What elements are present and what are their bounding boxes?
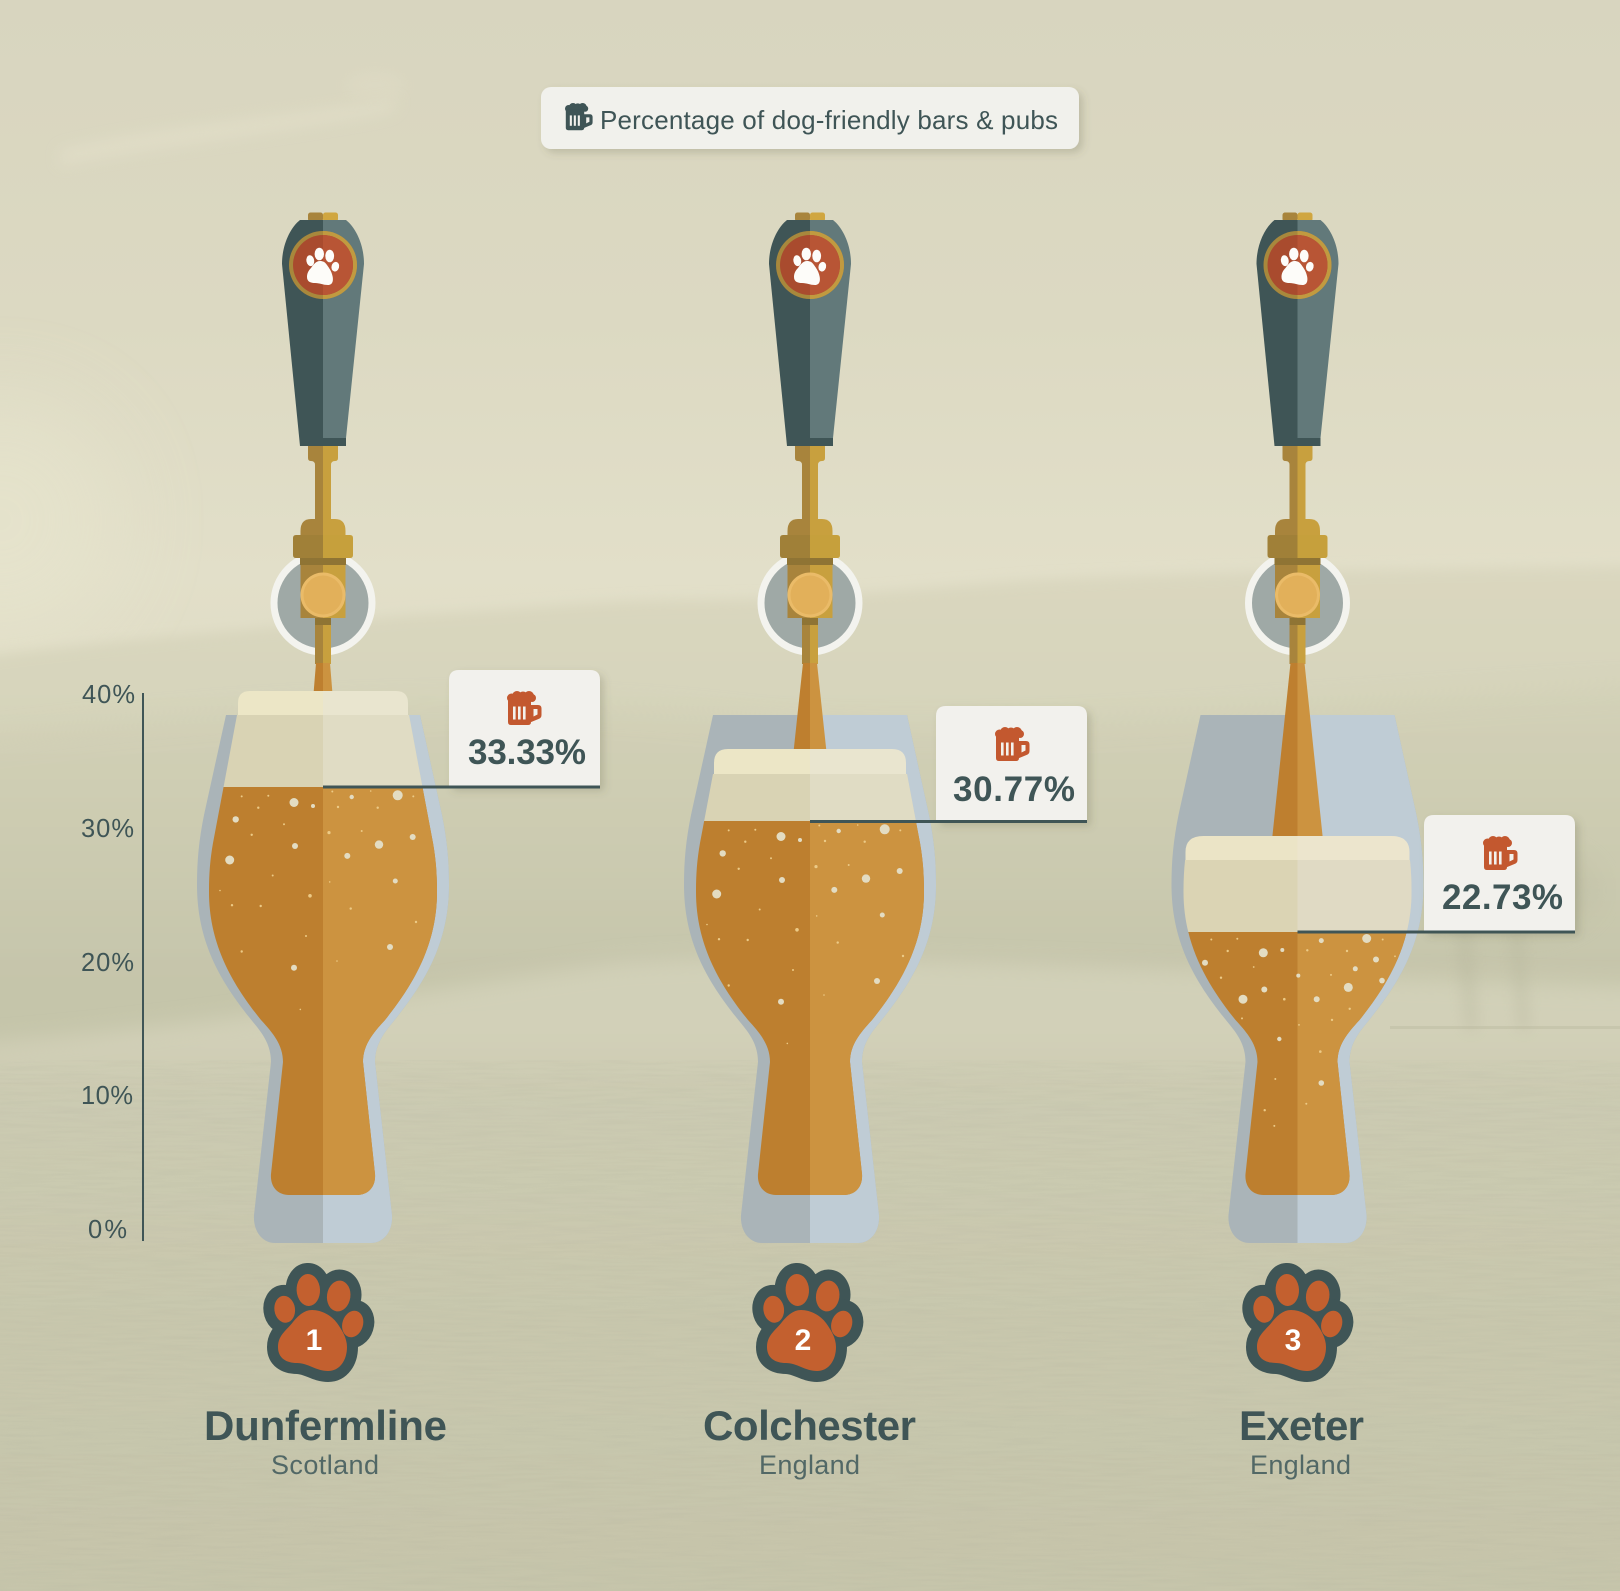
bubbles: Exeter [1202, 934, 1396, 1127]
glass: Colchester [684, 715, 936, 1243]
country: Scotland: Scotland [271, 1450, 379, 1480]
city name: Dunfermline: Dunfermline [204, 1402, 447, 1449]
paw rank 2: 2 [795, 1324, 811, 1357]
axis labels: 40% [82, 681, 135, 709]
axis labels [81, 681, 135, 1244]
title box [541, 87, 1079, 149]
beer tap: Colchester [761, 212, 859, 664]
title text: Percentage of dog-friendly bars & pubs [600, 105, 1058, 135]
value label: 33.33% [323, 670, 600, 788]
paw rank 1 [273, 1273, 367, 1371]
bubbles: Colchester [706, 824, 904, 1044]
paw rank 1: 1 [306, 1324, 322, 1357]
value label: 30.77%: 30.77% [953, 770, 1075, 809]
country: England: England [1250, 1450, 1351, 1480]
column 2: Colchester [684, 212, 1087, 1480]
glass: Exeter [1172, 715, 1424, 1243]
icon: beer mug [565, 103, 593, 130]
glass: Dunfermline [197, 715, 449, 1243]
column 3: Exeter [1172, 212, 1575, 1480]
country: England: England [759, 1450, 860, 1480]
beer tap: Dunfermline [274, 212, 372, 664]
beer fill with foam: Dunfermline [209, 663, 437, 1195]
bubbles: Dunfermline [219, 790, 417, 1010]
value label: 22.73% [1298, 815, 1575, 934]
city name: Colchester: Colchester [703, 1402, 916, 1449]
beer fill with foam: Exeter [1184, 663, 1412, 1195]
value label: 22.73%: 22.73% [1442, 878, 1563, 917]
y axis [81, 681, 144, 1244]
axis labels: 0% [88, 1216, 127, 1244]
beer tap: Exeter [1248, 212, 1346, 664]
column 1: Dunfermline [197, 212, 600, 1480]
city name: Exeter: Exeter [1239, 1402, 1364, 1449]
axis labels: 20% [81, 949, 134, 977]
beer fill with foam: Colchester [696, 663, 924, 1195]
paw rank 2 [762, 1273, 856, 1371]
axis labels: 10% [81, 1082, 133, 1110]
value label: 30.77% [810, 706, 1087, 823]
paw rank 3: 3 [1285, 1324, 1301, 1357]
value label: 33.33%: 33.33% [468, 733, 586, 772]
paw rank 3 [1252, 1273, 1346, 1371]
axis labels: 30% [81, 815, 134, 843]
